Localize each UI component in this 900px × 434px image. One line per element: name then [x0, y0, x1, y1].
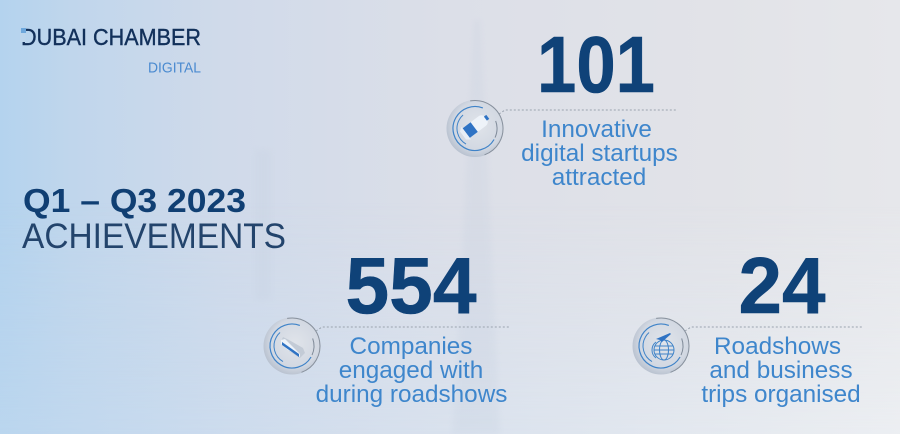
description: Innovative	[541, 116, 652, 143]
dotted leader	[316, 327, 510, 331]
description: trips organised	[701, 381, 861, 408]
number: 554: 554	[346, 241, 477, 330]
icon: laptop	[260, 314, 324, 378]
description: during roadshows	[316, 381, 507, 408]
description	[701, 333, 861, 408]
heading: Q1 – Q3 2023 achievements: Q1 – Q3 2023	[23, 183, 246, 220]
logo: Dubai Chamber Digital: DUBAI CHAMBER	[21, 24, 201, 50]
icon: globe and plane	[629, 314, 693, 378]
logo: Dubai Chamber Digital: DIGITAL	[148, 60, 201, 76]
description	[521, 116, 678, 191]
description: Roadshows	[714, 333, 841, 360]
dotted leader	[685, 327, 862, 331]
description: Companies	[350, 333, 472, 360]
number: 24: 24	[738, 241, 826, 330]
number: 101: 101	[537, 20, 655, 109]
heading: Q1 – Q3 2023 achievements: ACHIEVEMENTS	[22, 217, 286, 256]
description: digital startups	[521, 140, 678, 167]
description: attracted	[552, 164, 646, 191]
description	[316, 333, 507, 408]
description: and business	[709, 357, 853, 384]
logo: Dubai Chamber Digital	[20, 24, 201, 76]
description: engaged with	[339, 357, 483, 384]
heading: Q1 – Q3 2023 achievements	[22, 183, 286, 256]
dotted leader	[499, 110, 677, 114]
stat: 24 roadshows	[629, 241, 862, 408]
stat: 554 companies	[260, 241, 510, 408]
icon: rocket	[443, 96, 507, 161]
stat: 101 digital startups	[443, 20, 678, 191]
